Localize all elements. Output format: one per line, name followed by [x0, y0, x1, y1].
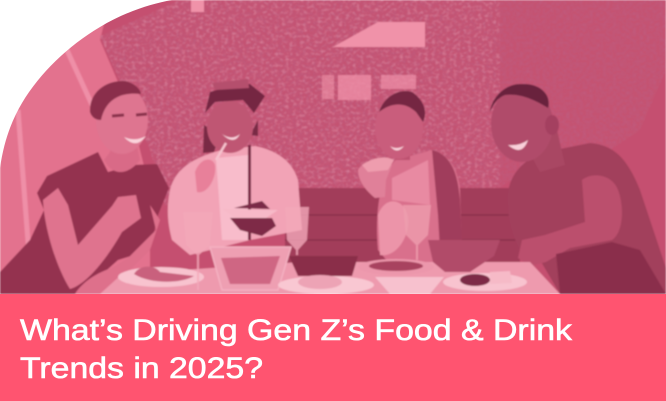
salad plate	[368, 258, 424, 263]
food plate right	[443, 273, 527, 291]
wine glass 3	[403, 205, 431, 260]
title: Trends in 2025?	[20, 352, 263, 385]
glass right	[285, 207, 309, 255]
center plate	[278, 276, 374, 294]
left light wall	[0, 24, 150, 272]
wall background	[99, 0, 666, 294]
glass dish	[428, 240, 500, 272]
bright windows	[191, 0, 425, 100]
foliage texture	[100, 0, 616, 202]
food plate left	[118, 267, 204, 287]
title: What’s Driving Gen Z’s Food & Drink	[20, 314, 573, 347]
photo: four friends eating at a table, pink duotone	[0, 0, 666, 294]
person 4: man in dark T-shirt	[490, 84, 666, 294]
white bowl	[375, 277, 444, 294]
title banner	[0, 294, 666, 401]
person 3: woman in tie-dye top	[358, 91, 462, 262]
person 1: woman in dark top	[0, 81, 169, 294]
bamboo foliage	[100, 0, 666, 205]
wooden bench	[285, 188, 520, 263]
glass left	[196, 252, 202, 289]
table with food	[100, 205, 560, 294]
glass bowl with food	[210, 247, 291, 290]
white posts	[16, 49, 92, 244]
dark dish	[289, 256, 358, 276]
person 2: man in bandana and white shirt	[168, 79, 302, 255]
